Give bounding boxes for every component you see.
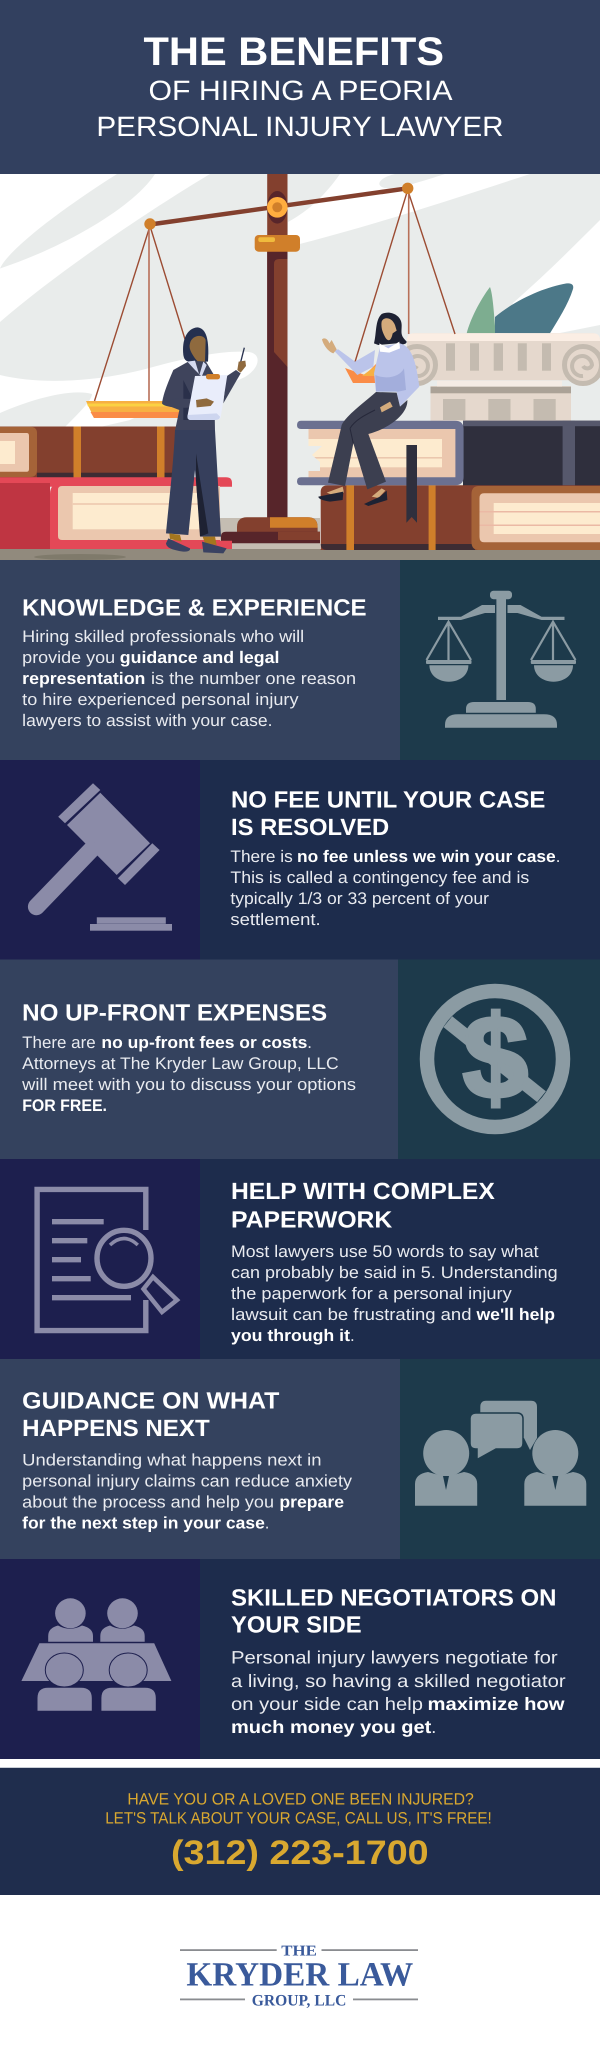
- heading: skilled negotiators on your side: SKILLED NEGOTIATORS ON: [231, 1584, 556, 1610]
- logo: The Kryder Law Group, LLC: KRYDER LAW: [186, 1957, 413, 1994]
- heading: help with complex paperwork: PAPERWORK: [231, 1207, 392, 1233]
- heading: skilled negotiators on your side: YOUR SIDE: [231, 1612, 362, 1638]
- text block: knowledge and experience: [22, 627, 356, 730]
- text block: no up-front expenses: [21, 1033, 356, 1115]
- text block: paperwork: Most lawyers use 50 words to say what: [231, 1242, 539, 1261]
- text block: negotiators: on your side can help: [231, 1694, 423, 1714]
- text block: knowledge and experience: representation: [22, 669, 145, 688]
- text block: no fee: There is: [230, 847, 293, 866]
- heading: guidance on what happens next: HAPPENS NEXT: [22, 1415, 210, 1441]
- title: [96, 30, 504, 142]
- right stack of books: [297, 421, 600, 550]
- icon: people around a table: [21, 1598, 171, 1711]
- text block: no fee: typically 1/3 or 33 percent of your: [230, 889, 489, 908]
- text block: no up-front expenses: .: [307, 1033, 312, 1052]
- heading: knowledge and experience: KNOWLEDGE & EXPERIENCE: [22, 595, 367, 621]
- text block: paperwork: you through it: [231, 1326, 350, 1345]
- call to action text: [105, 1790, 492, 1827]
- heading: no fee until your case is resolved: NO FEE UNTIL YOUR CASE: [231, 786, 545, 812]
- heading: no up-front expenses: NO UP-FRONT EXPENSES: [22, 1000, 327, 1026]
- text block: knowledge and experience: provide you: [22, 648, 115, 667]
- text block: guidance: about the process and help you: [22, 1492, 274, 1511]
- illustration: lawyers with giant scale and books: [0, 174, 600, 560]
- text block: knowledge and experience: lawyers to assist with your case.: [22, 711, 273, 730]
- call to action text: HAVE YOU OR A LOVED ONE BEEN INJURED?: [127, 1790, 474, 1808]
- text block: no up-front expenses: Attorneys at The Kryder Law Group, LLC: [22, 1054, 339, 1073]
- logo: The Kryder Law Group, LLC: GROUP, LLC: [252, 1993, 346, 2010]
- panel: knowledge and experience: [0, 560, 600, 760]
- text block: no up-front expenses: FOR FREE.: [22, 1096, 107, 1115]
- call to action text: LET'S TALK ABOUT YOUR CASE, CALL US, IT'S FREE!: [105, 1809, 492, 1827]
- text block: guidance: [22, 1450, 353, 1532]
- text block: paperwork: [231, 1242, 558, 1345]
- heading: guidance on what happens next: [22, 1388, 280, 1441]
- icon: two people talking: [415, 1401, 586, 1506]
- text block: knowledge and experience: guidance and legal: [120, 648, 279, 667]
- heading: help with complex paperwork: HELP WITH COMPLEX: [231, 1178, 495, 1204]
- title: OF HIRING A PEORIA: [148, 75, 453, 106]
- figure: seated lawyer: [318, 313, 419, 506]
- heading: help with complex paperwork: [231, 1178, 495, 1233]
- column capital: [398, 333, 600, 421]
- text block: paperwork: the paperwork for a personal injury: [231, 1284, 512, 1303]
- text block: no up-front expenses: no up-front fees or costs: [101, 1033, 307, 1052]
- icon: scales of justice: [426, 591, 576, 728]
- panel: skilled negotiators: [0, 1559, 600, 1759]
- icon: gavel: [36, 783, 172, 931]
- text block: paperwork: can probably be said in 5. Understanding: [231, 1263, 558, 1282]
- left stack of books: [0, 426, 232, 549]
- figure: standing lawyer with clipboard: [162, 327, 246, 553]
- text block: no fee: [230, 847, 560, 929]
- phone number: (312) 223-1700: [171, 1834, 429, 1872]
- text block: no up-front expenses: will meet with you to discuss your options: [21, 1075, 356, 1094]
- text block: guidance: .: [265, 1513, 269, 1532]
- call to action banner: [0, 1767, 600, 1895]
- text block: negotiators: a living, so having a skilled negotiator: [231, 1671, 566, 1691]
- text block: no fee: settlement.: [230, 910, 321, 929]
- text block: no fee: no fee unless we win your case: [297, 847, 556, 866]
- heading: guidance on what happens next: GUIDANCE ON WHAT: [22, 1388, 280, 1414]
- heading: skilled negotiators on your side: [231, 1584, 556, 1638]
- text block: paperwork: we'll help: [475, 1305, 555, 1324]
- panel: guidance on what happens next: [0, 1359, 600, 1559]
- text block: knowledge and experience: is the number one reason: [151, 669, 356, 688]
- leaves: [467, 283, 573, 333]
- logo: The Kryder Law Group, LLC: THE: [281, 1943, 317, 1959]
- title: PERSONAL INJURY LAWYER: [96, 111, 504, 142]
- text block: paperwork: .: [350, 1326, 355, 1345]
- text block: negotiators: [231, 1648, 566, 1737]
- text block: no up-front expenses: There are: [22, 1033, 96, 1052]
- text block: knowledge and experience: to hire experienced personal injury: [22, 690, 299, 709]
- text block: no fee: This is called a contingency fee and is: [230, 868, 529, 887]
- text block: guidance: Understanding what happens next in: [22, 1450, 321, 1469]
- heading: no fee until your case is resolved: [231, 786, 545, 840]
- icon: document with magnifier: [37, 1189, 177, 1331]
- text block: knowledge and experience: Hiring skilled professionals who will: [22, 627, 304, 646]
- text block: paperwork: lawsuit can be frustrating and: [231, 1305, 472, 1324]
- text block: guidance: personal injury claims can reduce anxiety: [22, 1471, 353, 1490]
- text block: no fee: .: [556, 847, 560, 866]
- text block: guidance: prepare: [279, 1492, 344, 1511]
- text block: negotiators: Personal injury lawyers negotiate for: [231, 1648, 558, 1668]
- panel: complex paperwork: [0, 1159, 600, 1359]
- icon: no dollar sign: $: [463, 992, 528, 1124]
- text block: guidance: for the next step in your case: [22, 1513, 265, 1532]
- text block: negotiators: maximize how: [428, 1694, 566, 1714]
- panel: no up-front expenses: [0, 960, 600, 1159]
- scale: [86, 174, 455, 543]
- title: THE BENEFITS: [144, 30, 444, 74]
- icon: no dollar sign: [427, 991, 563, 1127]
- text block: negotiators: much money you get: [231, 1717, 431, 1737]
- header panel: [0, 0, 600, 174]
- text block: negotiators: .: [431, 1717, 436, 1737]
- heading: no fee until your case is resolved: IS RESOLVED: [231, 814, 389, 840]
- logo: The Kryder Law Group, LLC: [180, 1943, 418, 2010]
- panel: no fee until resolved: [0, 760, 600, 960]
